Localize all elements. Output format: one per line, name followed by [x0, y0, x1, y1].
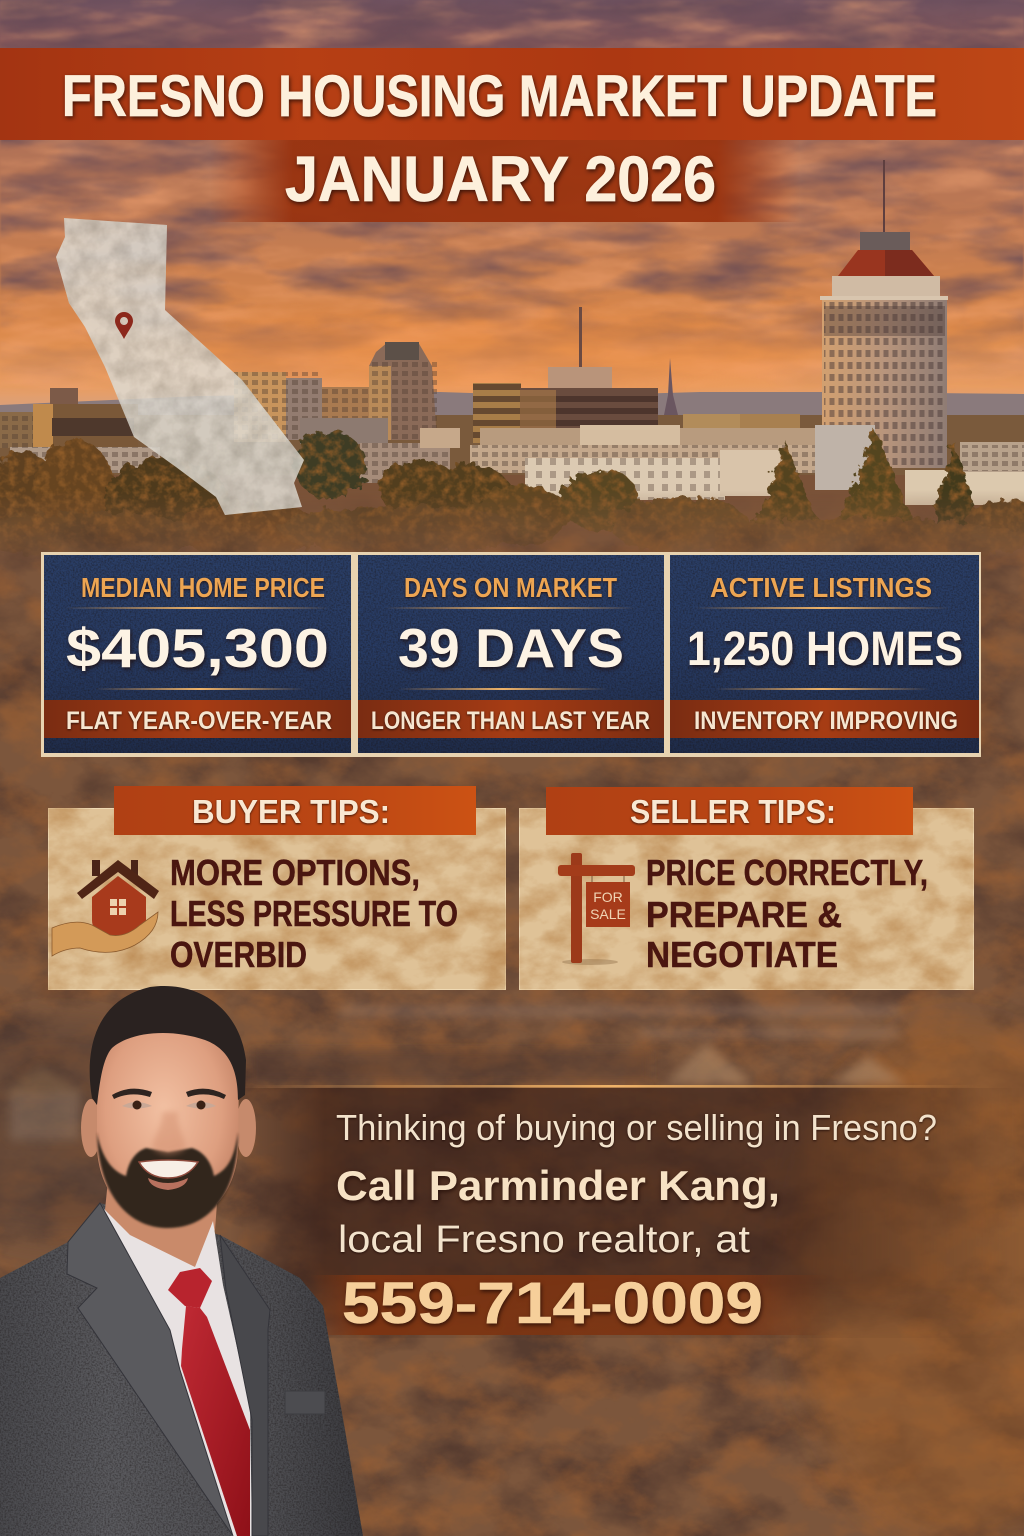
buyer tips text: MORE OPTIONS, — [170, 852, 420, 893]
phone number band: 559-714-0009 — [342, 1271, 763, 1336]
breast pocket — [285, 1391, 325, 1414]
eyebrows — [112, 1089, 226, 1099]
background: textured lower field — [0, 490, 1024, 1536]
panel: stat cards frame — [41, 552, 981, 757]
stat card: days on market: 39 DAYS — [398, 617, 624, 679]
tie — [168, 1268, 250, 1536]
buyer tips text: OVERBID — [170, 934, 307, 975]
icon: house in a hand — [52, 860, 159, 956]
eyes — [122, 1100, 216, 1110]
date text: JANUARY 2026 — [285, 143, 716, 215]
stat card: median home price: $405,300 — [66, 617, 329, 679]
portrait: realtor — [0, 986, 363, 1536]
jacket — [0, 1203, 363, 1536]
stat card: active listings — [670, 555, 979, 753]
skyline: distant hills — [0, 392, 1024, 418]
map of California with location pin — [56, 218, 304, 515]
skyline: downtown buildings — [0, 307, 800, 450]
panel: call to action — [230, 1085, 1020, 1338]
hair — [90, 986, 246, 1105]
map pin — [115, 312, 133, 339]
stat card: active listings: 1,250 HOMES — [687, 623, 963, 676]
lower lip — [148, 1178, 188, 1190]
beard — [97, 1132, 238, 1228]
shirt — [100, 1205, 252, 1536]
background: hazy neighbourhood — [0, 1005, 906, 1140]
seller tips text: NEGOTIATE — [646, 934, 838, 975]
seller tips tab: SELLER TIPS: — [630, 793, 836, 830]
icon: for sale sign: FOR — [593, 889, 623, 905]
right lapel — [220, 1235, 270, 1536]
seller tips text — [646, 852, 928, 975]
trees: foreground treeline — [0, 430, 1024, 562]
date banner — [210, 140, 800, 222]
stat card: median home price — [44, 555, 351, 753]
panel: seller tips — [519, 787, 974, 990]
nose — [153, 1112, 185, 1155]
skyline: Pacific Southwest tower — [820, 160, 948, 468]
stat card: days on market: DAYS ON MARKET — [404, 572, 617, 603]
buyer tips text: LESS PRESSURE TO — [170, 893, 458, 934]
ears — [81, 1099, 101, 1157]
seller tips text: PREPARE & — [646, 894, 842, 935]
mouth — [139, 1160, 198, 1178]
call to action question: Thinking of buying or selling in Fresno? — [336, 1107, 937, 1148]
stat card: median home price: FLAT YEAR-OVER-YEAR — [66, 707, 332, 735]
agent name: Call Parminder Kang, — [336, 1162, 780, 1209]
left lapel — [67, 1203, 233, 1536]
buyer tips tab: BUYER TIPS: — [192, 793, 390, 830]
skyline: haze behind buildings — [0, 415, 1024, 475]
stat card: active listings: ACTIVE LISTINGS — [710, 572, 932, 603]
stat card: days on market: LONGER THAN LAST YEAR — [371, 707, 650, 735]
phone number band — [310, 1271, 830, 1336]
stat card: median home price: MEDIAN HOME PRICE — [81, 572, 325, 603]
icon: for sale sign — [558, 853, 635, 965]
panel: buyer tips — [48, 786, 506, 990]
seller tips tab — [546, 787, 913, 835]
icon: for sale sign: SALE — [590, 906, 626, 922]
neck — [105, 1180, 218, 1268]
agent description: local Fresno realtor, at — [338, 1219, 750, 1261]
buyer tips text — [170, 852, 458, 975]
seller tips text: PRICE CORRECTLY, — [646, 852, 928, 893]
background: sunset sky — [0, 0, 1024, 420]
California shape — [56, 218, 304, 515]
skyline: low civic buildings — [10, 425, 1024, 505]
stat card: days on market — [358, 555, 664, 753]
face — [97, 1025, 239, 1226]
title banner — [0, 48, 1024, 140]
stat card: active listings: INVENTORY IMPROVING — [694, 707, 958, 735]
buyer tips tab — [114, 786, 476, 835]
